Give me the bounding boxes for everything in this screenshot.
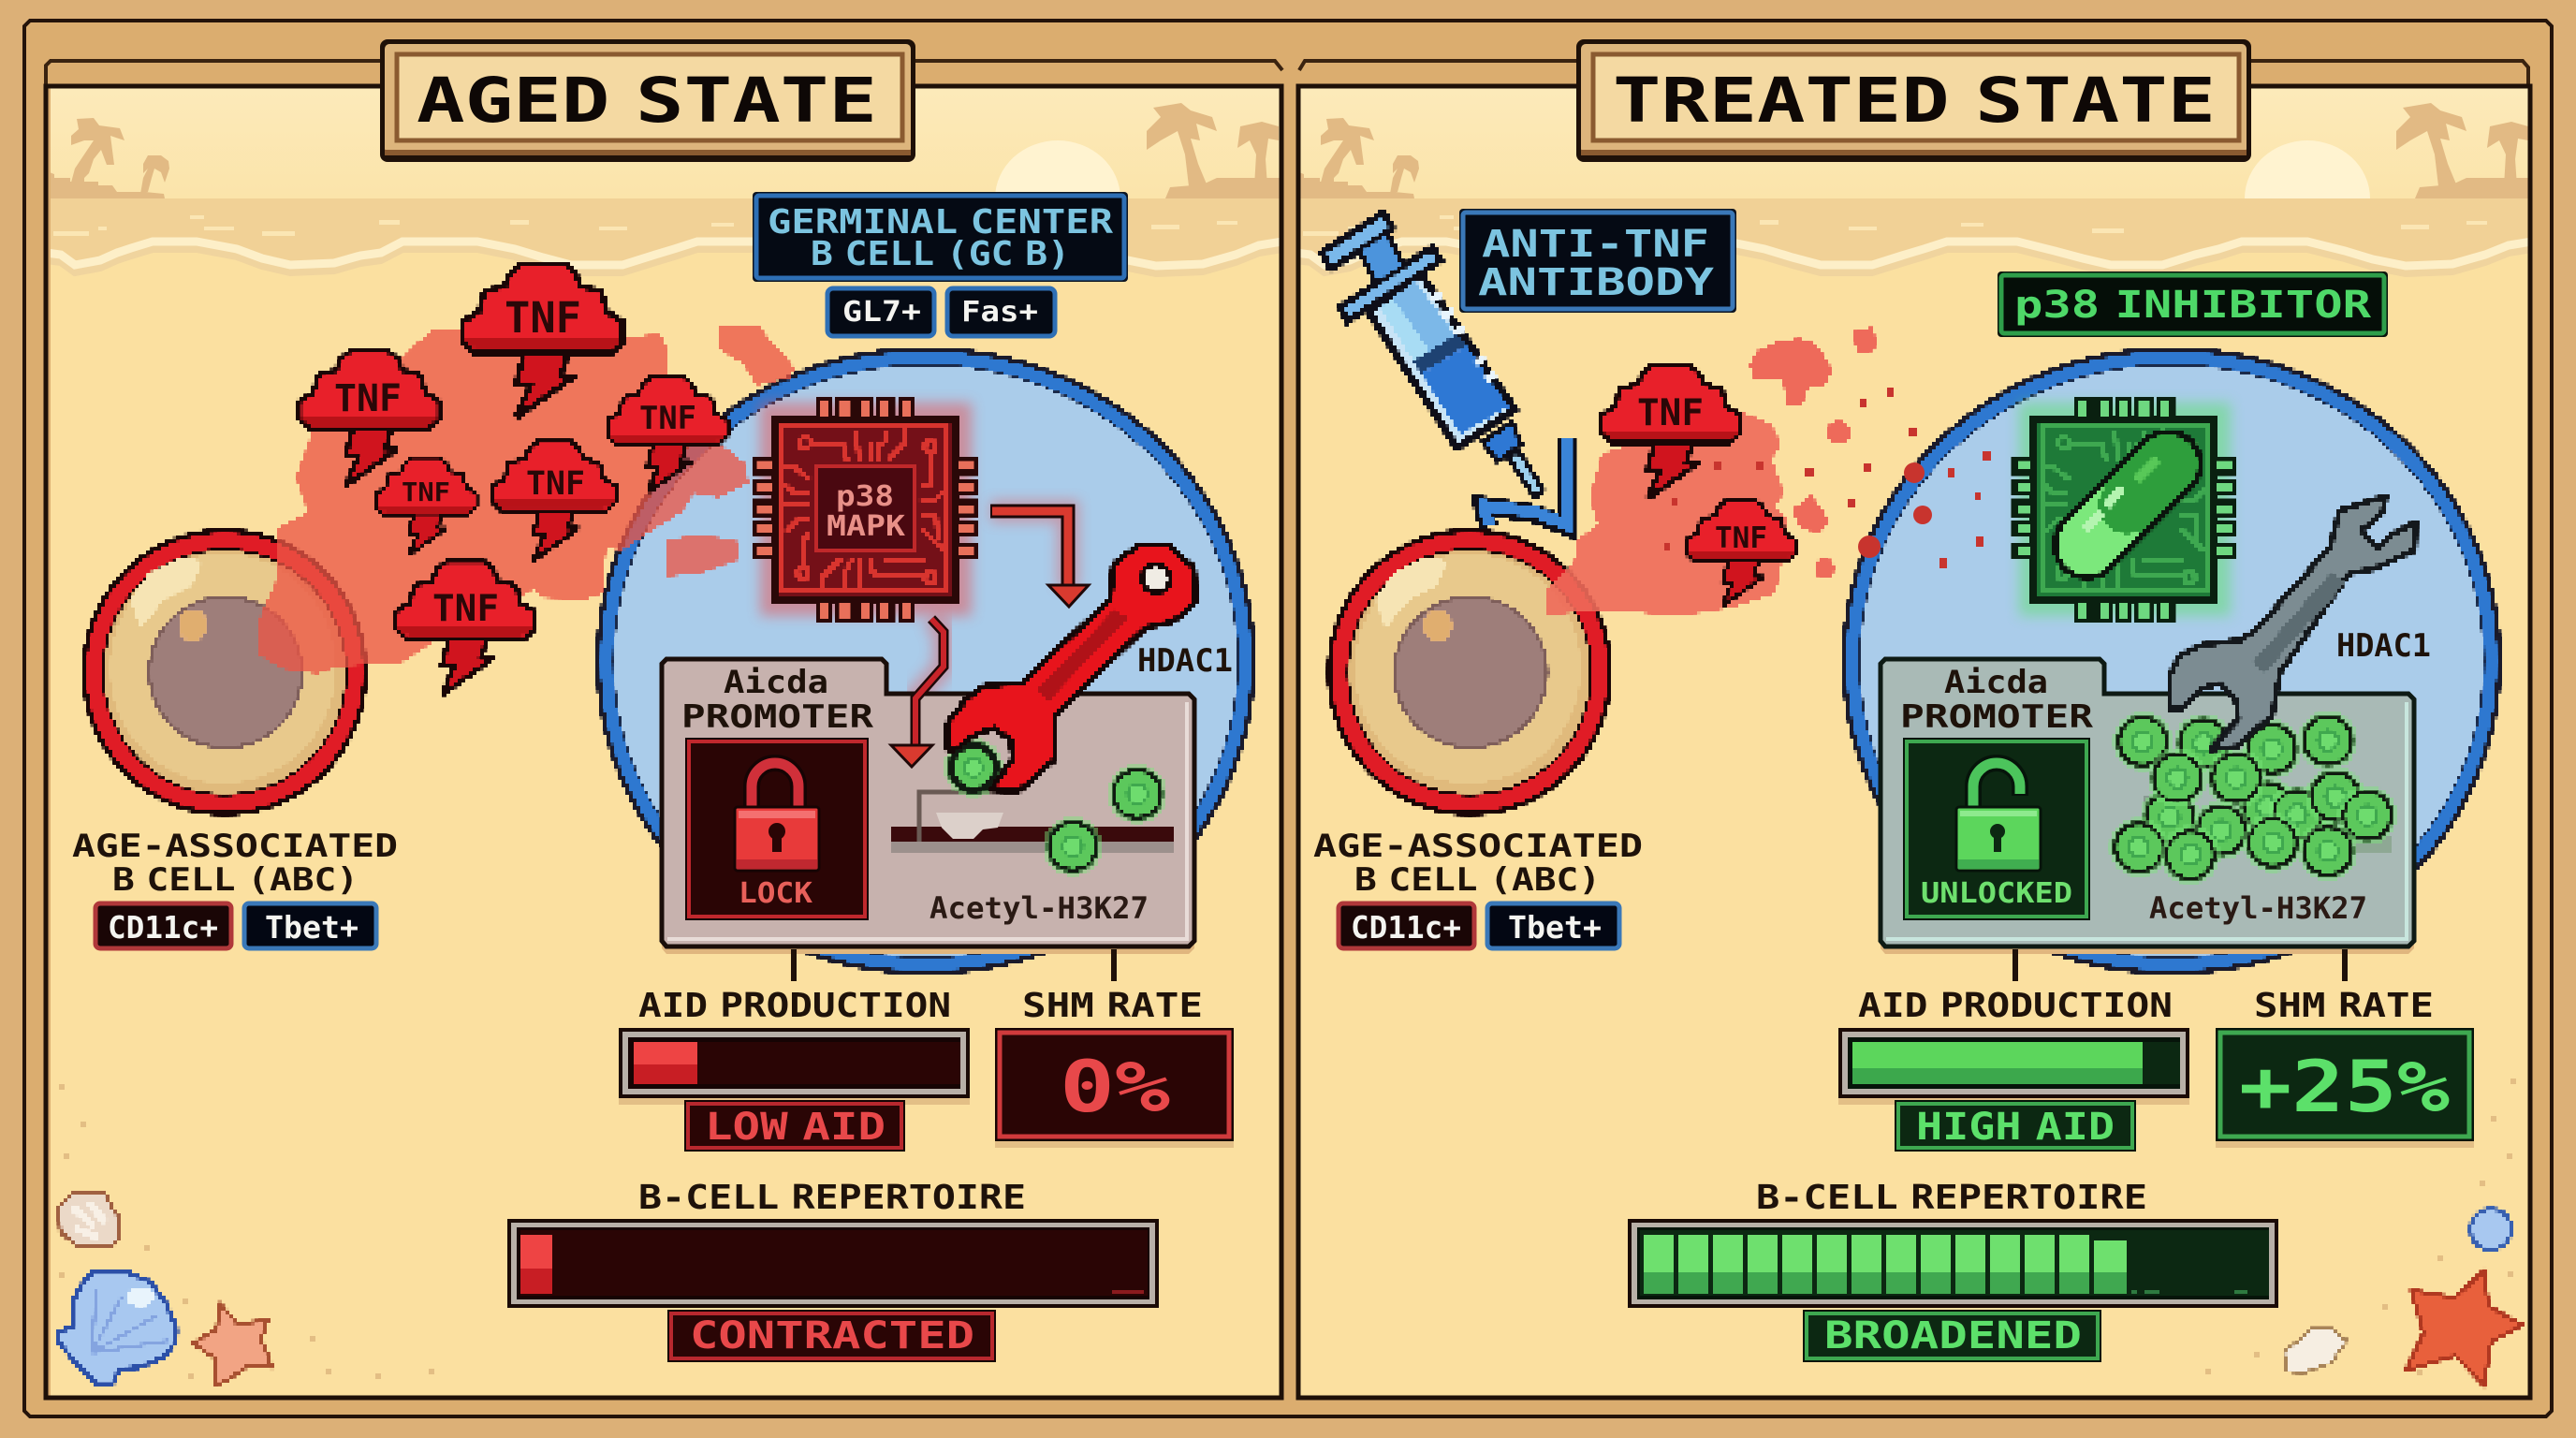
flange [1341, 248, 1440, 320]
panel: treated state background [1295, 86, 2532, 1398]
label: germinal center B cell: GERMINAL CENTER [768, 203, 1113, 242]
TNF haze dispersing [1545, 328, 1877, 616]
decorative starfish [2407, 1272, 2521, 1384]
decorative shell: cream [59, 1192, 118, 1247]
heading: B-cell repertoire: B-CELL REPERTOIRE [638, 1179, 1026, 1217]
label: age-associated B cell [72, 828, 398, 899]
needle [1509, 451, 1543, 496]
heading: SHM rate: SHM RATE [1022, 987, 1203, 1025]
sand specks [59, 1078, 2516, 1379]
chip: CD11c+: CD11c+ [108, 909, 218, 946]
badge: contracted: CONTRACTED [690, 1314, 974, 1357]
chip: GL7+ [827, 288, 934, 336]
capsule [2086, 459, 2168, 545]
badge: high AID: HIGH AID [1916, 1106, 2115, 1149]
TNF cloud 2 [1687, 501, 1795, 604]
connector ticks [791, 949, 1117, 981]
TNF cloud 4 [375, 458, 476, 553]
heading: AID production: AID PRODUCTION [1858, 987, 2173, 1025]
promoter heading: Aicda [1944, 664, 2048, 701]
age-associated B cell [82, 529, 367, 815]
arrow: antibody blocking bracket [1483, 438, 1566, 526]
decorative pebble [2471, 1210, 2510, 1249]
icon: p38 MAPK chip: p38 [836, 480, 894, 513]
bar: B-cell repertoire broadened [1628, 1219, 2278, 1308]
badge: broadened: BROADENED [1824, 1314, 2082, 1357]
TNF cloud 6: TNF [432, 588, 499, 630]
badge: high AID [1895, 1100, 2136, 1152]
heading: SHM rate: SHM RATE [2254, 987, 2434, 1025]
icon: red HDAC1 wrench [948, 545, 1195, 791]
decorative starfish [195, 1306, 271, 1384]
readout: SHM rate 0%: 0% [1060, 1045, 1170, 1128]
icon: p38 MAPK chip [756, 400, 974, 620]
TNF cloud 3 [607, 377, 727, 491]
TNF cloud 4: TNF [402, 477, 450, 507]
label: Acetyl-H3K27: Acetyl-H3K27 [929, 890, 1149, 926]
label: p38 inhibitor: p38 INHIBITOR [2014, 284, 2372, 327]
TNF cloud 2: TNF [1715, 521, 1767, 555]
panel frame lines [46, 61, 2528, 86]
label: anti-TNF antibody [1459, 209, 1736, 313]
age-associated B cell [1327, 529, 1612, 815]
TNF cloud 1 [463, 264, 622, 416]
TNF cloud 1: TNF [1637, 392, 1704, 434]
red particles [1664, 388, 1991, 568]
label: HDAC1: HDAC1 [2336, 627, 2431, 665]
Aicda promoter plate [662, 659, 1194, 954]
label: germinal center B cell: B CELL (GC B) [811, 235, 1070, 273]
TNF cloud 3: TNF [639, 400, 696, 437]
label: HDAC1: HDAC1 [1137, 642, 1233, 680]
TNF haze [259, 325, 794, 673]
label: anti-TNF antibody: ANTI-TNF [1482, 223, 1709, 266]
decorative shell: blue [59, 1273, 176, 1383]
chip: Fas+: Fas+ [961, 296, 1038, 329]
icon: open padlock: UNLOCKED [1921, 877, 2072, 910]
label: germinal center B cell [753, 192, 1128, 282]
chip: Tbet+: Tbet+ [1508, 909, 1602, 946]
badge: broadened [1803, 1310, 2101, 1362]
icon: anti-TNF syringe [1323, 213, 1543, 496]
readout: SHM rate 0% [995, 1028, 1234, 1148]
title text: AGED STATE [417, 65, 877, 137]
chip: CD11c+ [1339, 903, 1474, 948]
readout: SHM rate +25% [2216, 1028, 2474, 1148]
chromatin strand [891, 792, 1174, 853]
chip: Tbet+: Tbet+ [265, 909, 359, 946]
chromatin strand [2144, 796, 2392, 853]
chip: GL7+: GL7+ [842, 296, 921, 329]
label: age-associated B cell: AGE-ASSOCIATED [72, 828, 398, 865]
arrow: p38 glow [915, 619, 944, 749]
bar: B-cell repertoire contracted [507, 1219, 1159, 1308]
label: anti-TNF antibody: ANTIBODY [1478, 261, 1714, 304]
TNF cloud 5 [493, 442, 615, 559]
bar: AID production low [619, 1028, 970, 1105]
label: age-associated B cell: B CELL (ABC) [112, 861, 359, 899]
label: Acetyl-H3K27: Acetyl-H3K27 [2149, 890, 2367, 926]
heading: B-cell repertoire: B-CELL REPERTOIRE [1756, 1179, 2147, 1217]
icon: padlock: LOCK [739, 877, 812, 910]
TNF cloud 1: TNF [505, 293, 581, 343]
label: age-associated B cell: AGE-ASSOCIATED [1313, 828, 1643, 865]
icon: gray HDAC1 wrench [2170, 497, 2415, 749]
germinal center B cell body [596, 347, 1255, 975]
bar: AID production high [1838, 1028, 2189, 1105]
title plate: treated state [1576, 39, 2251, 162]
title plate: aged state [380, 39, 915, 162]
Aicda promoter plate [1881, 659, 2414, 954]
label: p38 inhibitor [1998, 271, 2388, 337]
TNF cloud 5: TNF [526, 465, 585, 503]
promoter heading: Aicda [724, 664, 828, 701]
badge: low AID: LOW AID [705, 1106, 886, 1149]
badge: contracted [667, 1310, 996, 1362]
readout: SHM rate +25%: +25% [2239, 1045, 2450, 1128]
badge: low AID [684, 1100, 905, 1152]
title text: TREATED STATE [1613, 65, 2216, 137]
label: age-associated B cell: B CELL (ABC) [1354, 861, 1601, 899]
icon: open padlock [1903, 738, 2090, 920]
germinal center B cell body [1842, 347, 2501, 975]
chip: Fas+ [947, 288, 1055, 336]
connector ticks [2012, 949, 2348, 981]
barrel [1369, 274, 1514, 447]
arrow: p38 to wrench [990, 511, 1089, 607]
chip: Tbet+ [244, 903, 376, 948]
chip: CD11c+ [95, 903, 231, 948]
plunger [1357, 228, 1404, 288]
TNF cloud 6 [396, 562, 534, 693]
panel: aged state background [46, 86, 1282, 1398]
icon: p38 MAPK chip: MAPK [827, 510, 905, 543]
acetyl marks [944, 739, 1166, 875]
TNF cloud 1 [1602, 365, 1740, 497]
icon: padlock [685, 738, 869, 920]
label: age-associated B cell [1313, 828, 1643, 899]
TNF cloud 2 [300, 351, 439, 484]
icon: green chip with pill [2015, 400, 2233, 620]
arrow shaft over plate [891, 619, 944, 767]
Aicda promoter plate: PROMOTER [1900, 698, 2094, 736]
heading: AID production: AID PRODUCTION [638, 987, 951, 1025]
acetyl marks cluster [2110, 712, 2396, 884]
TNF cloud 2: TNF [334, 377, 402, 420]
Aicda promoter plate: PROMOTER [681, 698, 874, 736]
decorative white shell [2285, 1329, 2346, 1372]
chip: Tbet+ [1487, 903, 1619, 948]
chip: CD11c+: CD11c+ [1351, 909, 1461, 946]
